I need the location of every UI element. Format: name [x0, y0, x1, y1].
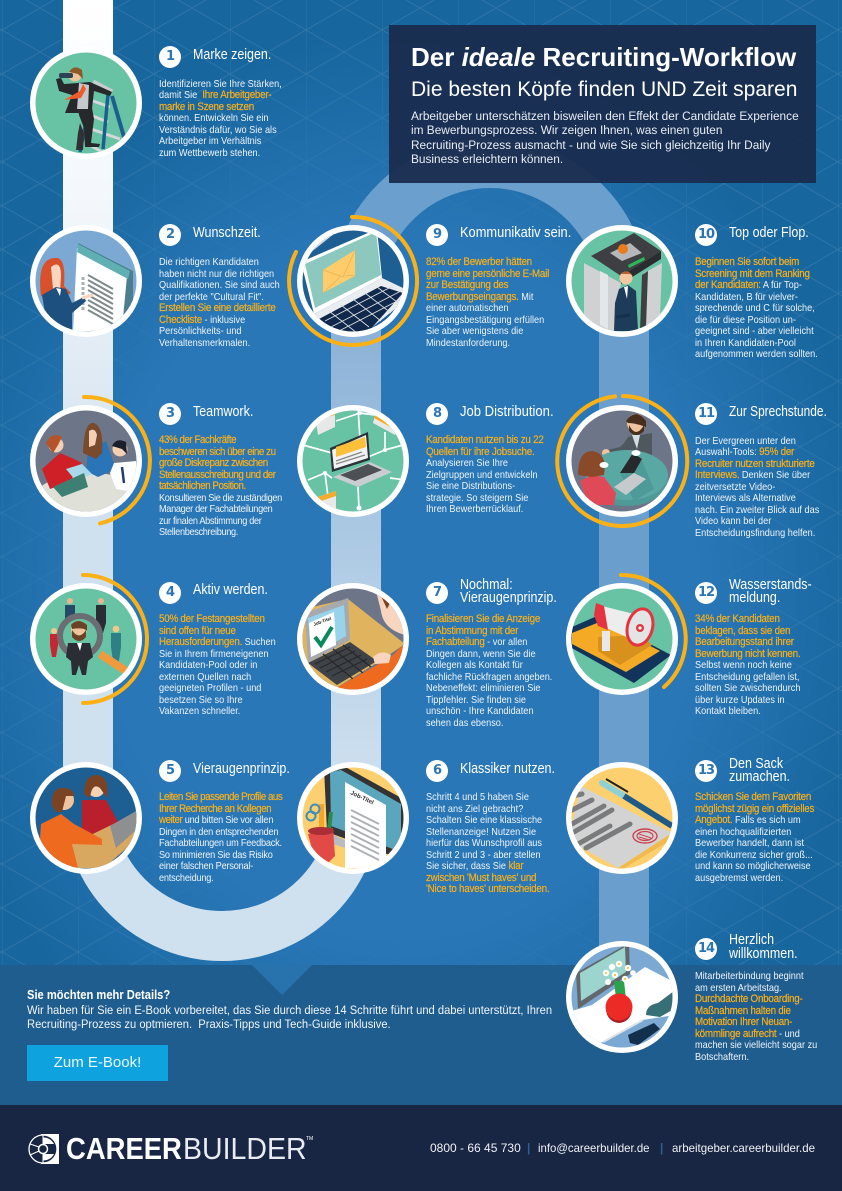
- CTA text: Wir haben für Sie ein E-Book vorbereitet, das Sie durch diese 14 Schritte führt und dabei unterstützt, Ihren: [27, 1003, 552, 1017]
- body text: aufgenommen werden sollten.: [695, 349, 818, 360]
- heading: [460, 576, 557, 606]
- number badge 3: [159, 403, 181, 425]
- body text: kömmlinge aufrecht - und: [695, 1028, 800, 1040]
- body text: [159, 257, 280, 348]
- icon: job posting with desk items: [297, 762, 409, 874]
- step 1 panel: [30, 46, 282, 159]
- heading: Zur Sprechstunde.: [729, 404, 827, 420]
- body text: Recruiter nutzen strukturierte: [695, 458, 815, 470]
- icon: woman with checklist: [30, 225, 142, 337]
- step 7 panel: [297, 576, 557, 729]
- button: Zum E-Book!: [54, 1054, 141, 1071]
- CTA heading: Sie möchten mehr Details?: [27, 987, 170, 1002]
- body text: zur finalen Abstimmung der: [159, 516, 261, 527]
- body text: sollten Sie zwischendurch: [695, 683, 800, 694]
- body text: Mitarbeiterbindung beginnt: [695, 971, 804, 982]
- body text: Konsultieren Sie die zuständigen: [159, 493, 282, 504]
- number badge 14: [695, 938, 717, 960]
- number badge 5: 5: [166, 763, 174, 778]
- heading: Top oder Flop.: [729, 225, 809, 241]
- body text: [695, 613, 800, 717]
- logo: CareerBuilder: [28, 1131, 313, 1166]
- body text: weiter und bitten Sie vor allen: [159, 814, 273, 826]
- body text: [159, 613, 276, 717]
- body text: Arbeitgeber im Verhältnis: [159, 136, 261, 147]
- body text: der perfekte "Cultural Fit".: [159, 292, 264, 302]
- wordmark: CAREER: [66, 1131, 182, 1166]
- heading: [729, 756, 790, 785]
- number badge 10: 10: [698, 227, 714, 242]
- body text: Zielgruppen und entwickeln: [426, 470, 538, 481]
- heading: Den Sack: [729, 756, 783, 772]
- body text: Verständnis dafür, wo Sie als: [159, 125, 277, 136]
- body text: einen hochqualifizierten: [695, 827, 791, 838]
- body text: [159, 434, 282, 538]
- body text: Angebot. Falls es sich um: [695, 814, 801, 826]
- body text: zwischen 'Must haves' und: [426, 872, 536, 884]
- heading: Vieraugenprinzip.: [460, 590, 557, 606]
- number badge 7: [426, 582, 448, 604]
- heading: meldung.: [729, 590, 780, 606]
- body text: Verhaltensmerkmalen.: [159, 338, 250, 348]
- body text: in Abstimmung mit der: [426, 625, 518, 637]
- body text: Stellenausschreibung und der: [159, 469, 276, 481]
- body text: marke in Szene setzen: [159, 101, 254, 113]
- body text: Entscheidung gefallen ist,: [695, 672, 799, 683]
- body text: zur Bestätigung des: [426, 279, 508, 291]
- number badge 6: [426, 760, 448, 782]
- heading: Nochmal:: [460, 576, 513, 592]
- step 13 panel: [566, 756, 814, 884]
- body text: 43% der Fachkräfte: [159, 434, 236, 446]
- body text: Eingangsbestätigung erfüllen: [426, 314, 544, 326]
- body text: Vakanzen schneller.: [159, 706, 240, 717]
- body text: Checkliste - inklusive: [159, 314, 245, 326]
- body text: Persönlichkeits- und: [159, 326, 242, 337]
- number badge 11: [695, 403, 717, 425]
- intro text: im Bewerbungsprozess. Wir zeigen Ihnen, was einen guten: [411, 123, 722, 137]
- title box: [389, 25, 816, 183]
- body text: am ersten Arbeitstag.: [695, 983, 782, 994]
- body text: Kontakt bleiben.: [695, 706, 761, 717]
- icon: contract with pen and stamp: [566, 762, 678, 874]
- body text: [158, 791, 282, 884]
- body text: Interviews. Denken Sie über: [695, 469, 810, 481]
- body text: nicht ans Ziel gebracht?: [426, 804, 523, 815]
- step 5 panel: [30, 760, 290, 884]
- intro text: [411, 109, 799, 166]
- body text: Kandidaten, B für vielver-: [695, 292, 798, 302]
- step 6 panel: [297, 760, 555, 895]
- icon: approving a job ad on laptop: Job-Titel: [313, 616, 332, 627]
- body text: die Konkurrenz sicher groß...: [695, 850, 813, 861]
- body text: in Ihren Kandidaten-Pool: [695, 338, 796, 348]
- body text: möglichst zügig ein offizielles: [695, 803, 814, 815]
- body text: können. Entwickeln Sie ein: [159, 113, 269, 124]
- step 14 panel: [566, 932, 817, 1063]
- body text: die für diese Position un-: [695, 314, 796, 326]
- number badge 13: [695, 760, 717, 782]
- number badge 8: 8: [433, 406, 441, 421]
- body text: Qualifikationen. Sie sind auch: [159, 280, 280, 291]
- heading: willkommen.: [729, 946, 798, 962]
- body text: Botschaftern.: [695, 1052, 749, 1063]
- wordmark: BUILDER: [183, 1131, 307, 1166]
- number badge 14: 14: [698, 941, 714, 956]
- button: [27, 1045, 168, 1081]
- number badge 12: [695, 582, 717, 604]
- body text: Identifizieren Sie Ihre Stärken,: [159, 79, 282, 90]
- icon: candidate in security gate: [566, 225, 678, 337]
- icon: laptop with email and progress arc: [287, 215, 420, 347]
- body text: Bewerbung nicht kennen.: [695, 648, 800, 660]
- body text: Dingen in den entsprechenden: [159, 827, 278, 838]
- icon: job posting with desk items: Job-Titel: [349, 790, 375, 806]
- heading: zumachen.: [729, 769, 790, 785]
- body text: und kann so möglicherweise: [695, 861, 811, 872]
- body text: Stellenanzeige! Nutzen Sie: [426, 827, 536, 838]
- body text: Kandidaten-Pool oder in: [159, 660, 257, 671]
- heading: Marke zeigen.: [193, 47, 271, 63]
- CTA text: Recruiting-Prozess zu optmieren. Praxis-Tipps und Tech-Guide inklusive.: [27, 1017, 391, 1031]
- body text: geeigneten Profilen - und: [159, 683, 261, 694]
- body text: nach. Ein zweiter Blick auf das: [695, 505, 819, 516]
- body text: 'Nice to haves' unterscheiden.: [426, 883, 549, 895]
- icon: welcome desk with flowers: [566, 941, 678, 1053]
- band notch arrow: [252, 965, 312, 995]
- body text: Interviews als Alternative: [695, 493, 796, 504]
- body text: Schicken Sie dem Favoriten: [695, 791, 811, 803]
- body text: Motivation Ihrer Neuan-: [695, 1016, 792, 1028]
- body text: Stellenbeschreibung.: [159, 527, 238, 538]
- icon: job interview at table with progress arc: [555, 394, 690, 528]
- body text: beschweren sich über eine zu: [159, 446, 276, 458]
- intro text: Arbeitgeber unterschätzen bisweilen den Effekt der Candidate Experience: [411, 109, 799, 123]
- body text: fachliche Rückfragen angeben.: [426, 672, 552, 683]
- number badge 3: 3: [166, 406, 174, 421]
- body text: externen Quellen nach: [159, 672, 251, 683]
- body text: Kollegen als Kontakt für: [426, 660, 523, 671]
- body text: [426, 613, 552, 729]
- body text: Durchdachte Onboarding-: [695, 993, 803, 1005]
- body text: Tippfehler. Sie finden sie: [426, 695, 526, 706]
- heading: [729, 576, 812, 606]
- body text: ausgebremst werden.: [695, 873, 783, 884]
- main title: Der ideale Recruiting-Workflow: [411, 42, 796, 72]
- body text: geeignet sind - aber vielleicht: [695, 326, 814, 337]
- body text: Sie aber wenigstens die: [426, 326, 523, 337]
- footer: [0, 1105, 842, 1191]
- body text: strategie. So steigern Sie: [426, 493, 528, 504]
- icon: job ad distributed over network: [297, 405, 409, 517]
- body text: Screening mit dem Ranking: [695, 268, 810, 280]
- body text: der Kandidaten: A für Top-: [695, 279, 802, 291]
- number badge 1: 1: [166, 49, 174, 64]
- body text: Auswahl-Tools: 95% der: [695, 446, 794, 458]
- body text: Die richtigen Kandidaten: [159, 257, 259, 268]
- body text: Finalisieren Sie die Anzeige: [426, 613, 540, 625]
- body text: Schritt 2 und 3 - aber stellen: [426, 850, 541, 861]
- body text: Ihrer Recherche an Kollegen: [159, 803, 271, 815]
- body text: Entscheidungsfindung helfen.: [695, 528, 815, 539]
- body text: Beginnen Sie sofort beim: [695, 256, 799, 268]
- body text: Bearbeitungsstand ihrer: [695, 636, 794, 648]
- intro text: Recruiting-Prozess ausmacht - und wie Sie sich gleichzeitig Ihr Daily: [411, 138, 770, 152]
- body text: So minimieren Sie das Risiko: [159, 850, 273, 861]
- contact line: arbeitgeber.careerbuilder.de: [672, 1141, 815, 1155]
- body text: [695, 971, 817, 1063]
- body text: einer falschen Personal-: [159, 861, 253, 872]
- number badge 12: 12: [698, 585, 714, 600]
- body text: [694, 791, 814, 884]
- contact line: 0800 - 66 45 730: [430, 1141, 521, 1155]
- body text: Analysieren Sie Ihre: [426, 458, 508, 469]
- body text: Dingen dann, wenn Sie die: [426, 649, 536, 660]
- body text: Der Evergreen unter den: [695, 436, 796, 447]
- body text: gerne eine persönliche E-Mail: [426, 268, 549, 280]
- heading: Job Distribution.: [460, 404, 554, 420]
- number badge 1: [159, 46, 181, 68]
- body text: große Diskrepanz zwischen: [159, 457, 268, 469]
- number badge 8: [426, 403, 448, 425]
- number badge 9: 9: [433, 227, 441, 242]
- body text: Selbst wenn noch keine: [695, 660, 792, 671]
- number badge 2: [159, 224, 181, 246]
- wordmark: [66, 1131, 313, 1166]
- body text: Quellen für ihre Jobsuche.: [426, 446, 535, 458]
- body text: tatsächlichen Position.: [159, 480, 246, 492]
- number badge 4: [159, 582, 181, 604]
- body text: [426, 792, 549, 895]
- number badge 13: 13: [698, 763, 714, 778]
- icon: megaphone on smartphone with progress arc: [566, 573, 688, 695]
- body text: Bewerbungseingangs. Mit: [426, 290, 533, 302]
- heading: Klassiker nutzen.: [460, 761, 555, 777]
- step 2 panel: [30, 224, 280, 348]
- body text: Maßnahmen halten die: [695, 1005, 791, 1017]
- body text: [695, 256, 818, 360]
- step 10 panel: [566, 224, 818, 360]
- heading: Herzlich: [729, 932, 774, 948]
- body text: Sie in Ihrem firmeneigenen: [159, 649, 269, 660]
- icon: man with binoculars on ladder: [30, 52, 142, 159]
- body text: [426, 434, 544, 515]
- icon: approving a job ad on laptop: [297, 583, 409, 695]
- number badge 6: 6: [433, 763, 441, 778]
- body text: [426, 256, 549, 348]
- body text: Herausforderungen. Suchen: [159, 636, 276, 648]
- heading: Aktiv werden.: [193, 582, 268, 598]
- body text: einer automatischen: [426, 303, 509, 314]
- step 12 panel: [566, 573, 812, 717]
- body text: Kandidaten nutzen bis zu 22: [426, 434, 544, 446]
- body text: Ihren Bewerberrücklauf.: [426, 504, 523, 515]
- step 4 panel: [30, 573, 276, 717]
- body text: 82% der Bewerber hätten: [426, 256, 532, 268]
- number badge 5: [159, 760, 181, 782]
- body text: besetzen Sie so Ihre: [159, 695, 243, 706]
- intro text: Business erleichtern können.: [411, 152, 563, 166]
- number badge 9: [426, 224, 448, 246]
- heading: Kommunikativ sein.: [460, 225, 571, 241]
- heading: Wunschzeit.: [193, 225, 261, 241]
- body text: Sie sicher, dass Sie klar: [426, 860, 523, 872]
- body text: Sie eine Distributions-: [426, 481, 515, 492]
- subtitle: Die besten Köpfe finden UND Zeit sparen: [411, 78, 797, 101]
- body text: Video kann bei der: [695, 516, 771, 527]
- body text: Schritt 4 und 5 haben Sie: [426, 792, 529, 803]
- heading: Wasserstands-: [729, 576, 812, 592]
- body text: [159, 79, 282, 159]
- body text: Nebeneffekt: eliminieren Sie: [426, 683, 540, 694]
- icon: two colleagues at laptop: [30, 762, 142, 874]
- heading: Vieraugenprinzip.: [193, 761, 290, 777]
- body text: sehen das ebenso.: [426, 718, 503, 729]
- number badge 11: 11: [698, 406, 714, 421]
- contact line: |: [527, 1141, 530, 1155]
- step 3 panel: [30, 395, 282, 538]
- body text: damit Sie Ihre Arbeitgeber-: [159, 89, 271, 101]
- icon: team meeting with progress arc: [30, 395, 152, 526]
- step 9 panel: [287, 215, 571, 348]
- body text: Manager der Fachabteilungen: [159, 504, 272, 515]
- body text: hierfür das Wunschprofil aus: [426, 838, 542, 849]
- step 8 panel: [297, 403, 554, 517]
- body text: machen sie vielleicht sogar zu: [695, 1040, 817, 1051]
- contact line: info@careerbuilder.de: [538, 1141, 649, 1155]
- contact line: [430, 1141, 815, 1155]
- body text: haben nicht nur die richtigen: [159, 268, 274, 280]
- wordmark: TM: [306, 1136, 313, 1142]
- number badge 4: 4: [166, 585, 174, 600]
- body text: Fachabteilungen um Feedback.: [159, 838, 282, 849]
- body text: über kurze Updates in: [695, 695, 785, 706]
- body text: [695, 436, 819, 539]
- number badge 7: 7: [433, 585, 441, 600]
- body text: beklagen, dass sie den: [695, 625, 790, 637]
- bottom call-to-action band: [0, 965, 842, 1105]
- body text: 34% der Kandidaten: [695, 613, 780, 625]
- body text: 50% der Festangestellten: [159, 613, 265, 625]
- logo mark: [28, 1134, 59, 1164]
- step 11 panel: [555, 394, 827, 539]
- body text: Bewerber handelt, dann ist: [695, 838, 804, 849]
- number badge 2: 2: [166, 227, 174, 242]
- body text: sind offen für neue: [159, 625, 236, 637]
- body text: unschön - Ihre Kandidaten: [426, 706, 534, 717]
- number badge 10: [695, 224, 717, 246]
- body text: Fachabteilung - vor allen: [426, 636, 527, 648]
- CTA text: [27, 1003, 552, 1031]
- icon: magnifier over candidates with progress arc: [30, 573, 149, 705]
- heading: Teamwork.: [193, 404, 253, 420]
- heading: [729, 932, 798, 962]
- body text: entscheidung.: [159, 873, 214, 884]
- body text: Erstellen Sie eine detaillierte: [159, 302, 276, 314]
- contact line: |: [660, 1141, 663, 1155]
- body text: zeitversetzte Video-: [695, 482, 775, 493]
- body text: zum Wettbewerb stehen.: [159, 148, 260, 159]
- body text: Mindestanforderung.: [426, 338, 510, 348]
- body text: Leiten Sie passende Profile aus: [159, 791, 282, 803]
- body text: sprechende und C für solche,: [695, 303, 815, 314]
- body text: Schalten Sie eine klassische: [426, 815, 542, 826]
